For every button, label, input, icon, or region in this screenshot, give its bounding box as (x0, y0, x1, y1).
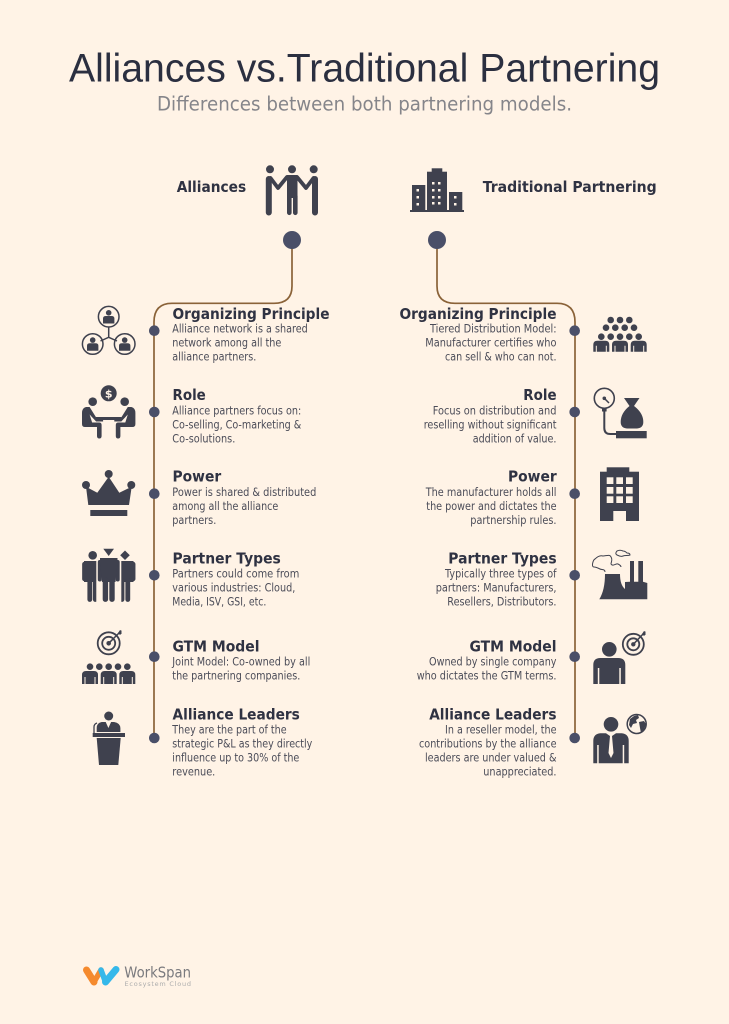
text: alliances power: among all the alliance (172, 500, 278, 513)
text: alliances role: Alliance partners focus on: (172, 404, 301, 417)
text: alliances leaders: strategic P&L as they directly (172, 737, 313, 750)
text: traditional power (425, 468, 557, 527)
text: alliances power: Power (172, 468, 222, 486)
text: alliances partner types: Media, ISV, GSI, etc. (172, 595, 266, 608)
text: alliances role: Co-solutions. (172, 432, 235, 445)
icon: crown (82, 470, 135, 516)
text: alliances gtm model: the partnering companies. (172, 670, 300, 683)
icon: partner network (82, 306, 135, 354)
text: traditional partner types: partners: Manufacturers, (436, 581, 556, 594)
icon: tiered crowd (593, 317, 647, 352)
text: traditional alliance leaders: In a reseller model, the (445, 723, 557, 736)
text: alliances power (172, 468, 316, 527)
text: alliances partner types (172, 549, 299, 608)
timeline: alliances (149, 231, 301, 743)
icon: person with target (593, 631, 646, 684)
text: traditional alliance leaders: leaders are under valued & (425, 751, 557, 764)
subtitle: Differences between both partnering models. (157, 93, 572, 116)
icon: partners at table with dollar: $ (105, 388, 113, 400)
icon: factory (592, 550, 647, 599)
text: alliances gtm model: Joint Model: Co-owned by all (171, 656, 310, 669)
text: traditional organizing principle: Tiered Distribution Model: (429, 323, 556, 336)
text: alliances gtm model (171, 638, 310, 683)
text: traditional partner types: Typically three types of (444, 567, 557, 580)
text: traditional partner types: Partner Types (448, 549, 557, 567)
text: traditional power: Power (508, 468, 557, 486)
text: traditional gtm model (417, 638, 557, 683)
icon: target and team (82, 630, 135, 684)
text: traditional role: reselling without significant (424, 418, 557, 431)
text: alliances organizing principle: Alliance network is a shared (172, 323, 308, 336)
text: traditional alliance leaders: Alliance Leaders (429, 705, 556, 723)
logo: WorkSpan: Ecosystem Cloud (124, 980, 191, 988)
text: traditional gtm model: Owned by single company (429, 656, 557, 669)
icon: city buildings (410, 168, 464, 212)
icon: office building (600, 467, 639, 521)
heading: Alliances: Alliances (177, 178, 246, 196)
text: alliances organizing principle (172, 305, 330, 364)
text: alliances power: partners. (172, 514, 216, 527)
text: traditional organizing principle: Manufacturer certifies who (425, 337, 557, 350)
text: traditional role: Focus on distribution and (433, 404, 556, 417)
icon: three people holding hands (266, 165, 318, 213)
text: alliances leaders: influence up to 30% of the (172, 751, 299, 764)
icon: three partner types (84, 549, 134, 602)
icon: businessman with globe (593, 714, 646, 763)
timeline: traditional partnering (428, 231, 580, 743)
text: traditional role: addition of value. (473, 432, 556, 445)
text: alliances leaders: They are the part of the (171, 723, 287, 736)
text: alliances leaders: Alliance Leaders (172, 705, 300, 723)
text: traditional partner types (436, 549, 557, 608)
text: alliances organizing principle: Organizing Principle (172, 305, 330, 323)
text: traditional gtm model: who dictates the GTM terms. (417, 670, 556, 683)
text: traditional alliance leaders (419, 705, 557, 778)
text: traditional organizing principle: can sell & who can not. (445, 351, 556, 364)
text: alliances partner types: Partners could come from (172, 567, 299, 580)
text: traditional role: Role (523, 386, 557, 404)
text: alliances partner types: various industries: Cloud, (172, 581, 295, 594)
icon: partners at table with dollar (82, 385, 135, 438)
text: traditional alliance leaders: contributions by the alliance (419, 737, 557, 750)
icon: gauge and sack (594, 388, 647, 438)
text: traditional organizing principle (400, 305, 557, 364)
text: alliances organizing principle: alliance partners. (172, 351, 256, 364)
logo: WorkSpan (86, 963, 191, 988)
text: alliances partner types: Partner Types (172, 549, 281, 567)
text: alliances role: Co-selling, Co-marketing & (172, 418, 302, 431)
text: alliances role (172, 386, 302, 445)
logo: WorkSpan: WorkSpan (124, 963, 191, 981)
text: alliances role: Role (172, 386, 206, 404)
text: traditional power: the power and dictates the (426, 500, 557, 513)
text: alliances leaders: revenue. (172, 765, 215, 778)
text: traditional power: partnership rules. (470, 514, 556, 527)
title: Alliances vs.Traditional Partnering (69, 46, 660, 90)
text: traditional role (424, 386, 557, 445)
text: traditional organizing principle: Organizing Principle (400, 305, 556, 323)
text: traditional partner types: Resellers, Distributors. (447, 595, 556, 608)
text: alliances gtm model: GTM Model (172, 638, 260, 656)
heading: Traditional Partnering: Traditional Partnering (483, 178, 657, 196)
text: traditional alliance leaders: unappreciated. (483, 765, 556, 778)
text: alliances organizing principle: network among all the (172, 337, 281, 350)
icon: speaker at podium (93, 712, 125, 765)
text: alliances power: Power is shared & distributed (172, 486, 316, 499)
text: alliances leaders (171, 705, 313, 778)
text: traditional gtm model: GTM Model (470, 638, 556, 656)
text: traditional power: The manufacturer holds all (425, 486, 556, 499)
